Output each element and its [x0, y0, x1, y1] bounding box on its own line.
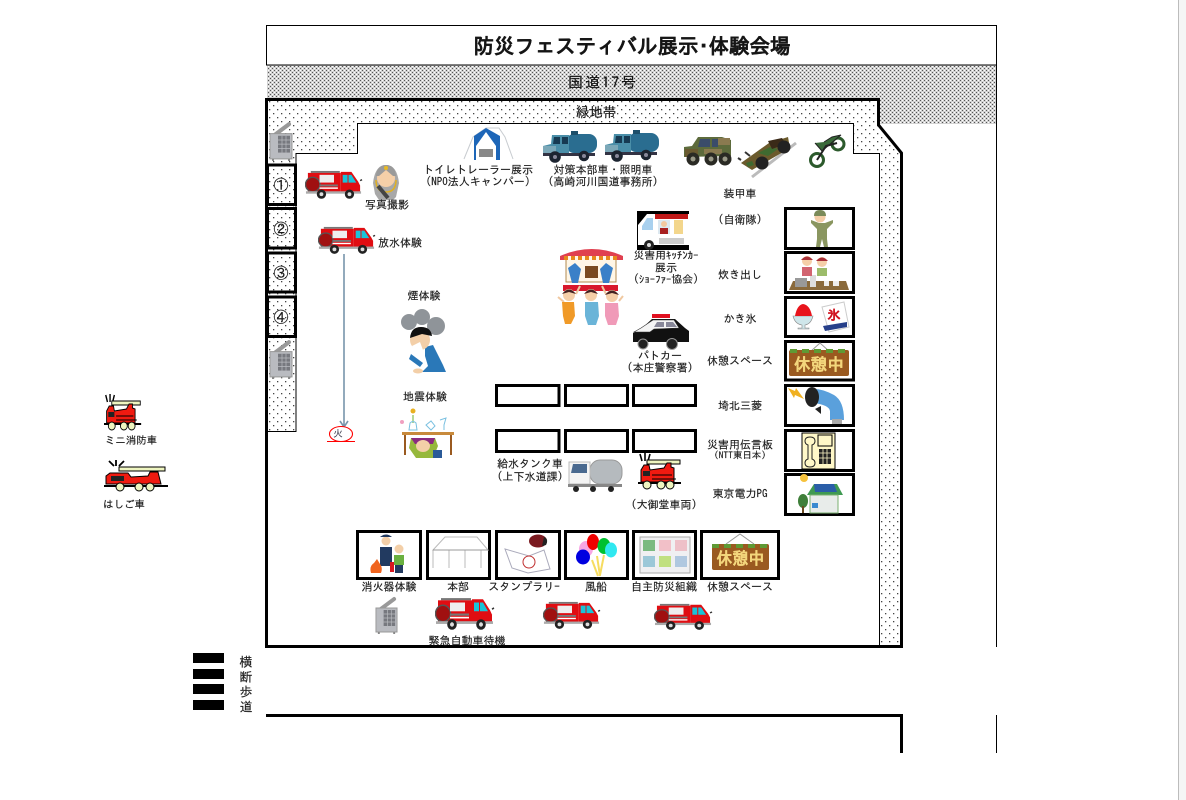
crosswalk label: 断: [240, 670, 252, 684]
entrance 1: [268, 165, 296, 204]
icon: festival stage with dancers: [558, 249, 623, 325]
crosswalk label: 道: [240, 700, 252, 714]
entrance 4: ④: [274, 310, 288, 324]
bottom booth: rest space sign: [702, 532, 778, 578]
entrance 3: [268, 253, 296, 292]
omido vehicle: [631, 453, 697, 510]
page edge: [1178, 0, 1186, 800]
arrow: water stream: [340, 254, 348, 427]
booth row bottom: [496, 430, 696, 452]
bottom booth: rest space sign: 休憩中: [716, 550, 764, 568]
icon: fire truck: [318, 227, 375, 254]
crosswalk label: [240, 656, 252, 714]
icon: military truck: [684, 137, 732, 166]
kitchen car exhibit: [634, 211, 698, 285]
booth: cooking: [786, 252, 854, 292]
icon: generator middle: [270, 342, 292, 379]
right booth list labels: (NTT東日本): [714, 450, 766, 460]
label: 災害用ｷｯﾁﾝｶｰ: [634, 250, 698, 261]
label: 給水タンク車: [497, 458, 563, 470]
label: rest space: 休憩スペース: [707, 354, 773, 366]
label: stamp rally: スタンプラリ-: [488, 580, 560, 592]
right boundary line: [996, 25, 998, 753]
icon: armored car: [738, 137, 796, 177]
icon: firefighter: [373, 165, 399, 200]
label: 放水体験: [378, 236, 422, 248]
road: route 17: 国道17号: [568, 74, 636, 90]
bottom booth: extinguisher: [358, 532, 420, 578]
booth: rest space sign: 休憩中: [794, 356, 844, 374]
bottom booth: headquarters tent: [428, 532, 490, 578]
police car: (本庄警察署): [627, 362, 693, 374]
icon: police car: [633, 314, 689, 350]
label: cooking: 炊き出し: [718, 270, 762, 280]
booth: shaved ice: 氷: [828, 308, 840, 322]
water discharge experience: [318, 227, 422, 254]
icon: generator bottom: [376, 599, 397, 634]
label: self defense force: (自衛隊): [718, 214, 762, 226]
right booth list labels: [707, 270, 773, 500]
command and lighting vehicles: (高崎河川国道事務所): [548, 176, 658, 188]
entrance 3: ③: [274, 266, 288, 280]
photo spot: [305, 165, 409, 210]
label: パトカー: [638, 350, 682, 362]
label: extinguisher: 消火器体験: [362, 580, 416, 592]
entrance 2: [268, 208, 296, 248]
bottom booth: stamp rally: [496, 532, 560, 578]
crosswalk stripes: [193, 653, 224, 710]
label: 緊急自動車待機: [428, 634, 506, 646]
kitchen car exhibit: (ｼｮｰﾌｧｰ協会): [634, 274, 698, 285]
fire target: 火: [333, 429, 343, 439]
police car: [627, 314, 693, 374]
icon: blue truck 2: [605, 130, 659, 162]
bottom booth: voluntary disaster group panel: [634, 532, 696, 578]
smoke experience: [401, 290, 446, 374]
label: armored vehicle: 装甲車: [724, 188, 756, 200]
icon: generator top: [270, 124, 292, 161]
road: route 17: [267, 66, 996, 124]
command and lighting vehicles: [543, 130, 659, 188]
label: shaved ice: かき氷: [724, 314, 756, 324]
icon: kitchen car: [637, 211, 689, 250]
icon: person in smoke: [401, 309, 446, 374]
booth: soldier: [786, 208, 854, 248]
bottom booth: balloons: [566, 532, 628, 578]
icon: tank truck: [568, 460, 622, 492]
booth: car charger: [786, 386, 854, 426]
entrance 1: ①: [274, 178, 288, 192]
crosswalk label: 歩: [240, 686, 252, 698]
label: 煙体験: [408, 290, 440, 302]
toilet trailer exhibit: (NPO法人キャンパー): [426, 176, 530, 188]
icon: fire truck 3: [654, 604, 712, 630]
crosswalk: [193, 653, 252, 714]
label: voluntary disaster group: 自主防災組織: [631, 580, 697, 592]
icon: person under table: [400, 408, 454, 458]
empty booths: [496, 386, 696, 452]
icon: tent: [464, 128, 513, 160]
venue thick boundary: [266, 100, 902, 646]
entrance boxes column: [268, 165, 296, 336]
title bar: 防災フェスティバル展示･体験会場: [474, 34, 790, 56]
booth: shaved ice: [786, 298, 854, 336]
label: 対策本部車・照明車: [554, 164, 652, 176]
booth: rest space sign: [786, 342, 854, 380]
label: 地震体験: [403, 390, 447, 402]
label: message board: 災害用伝言板: [707, 440, 773, 450]
label: saihoku mitsubishi: 埼北三菱: [718, 400, 762, 412]
label: balloons: 風船: [585, 580, 607, 592]
label: ミニ消防車: [105, 435, 157, 446]
kitchen car exhibit: 展示: [655, 262, 677, 274]
earthquake experience: [400, 390, 454, 458]
entrance 2: ②: [274, 222, 288, 236]
booth row top: [496, 386, 696, 406]
entrance 4: [268, 297, 296, 336]
label: トイレトレーラー展示: [423, 164, 533, 176]
crosswalk label: 横: [240, 656, 252, 668]
toilet trailer exhibit: [423, 128, 533, 188]
title bar: [266, 26, 996, 65]
armored vehicles: [684, 135, 844, 226]
water tank truck: [497, 458, 622, 492]
label: はしご車: [103, 499, 145, 510]
booth: solar house: [786, 474, 854, 514]
icon: motorcycle: [810, 135, 844, 166]
icon: fire truck: [436, 598, 494, 630]
water tank truck: (上下水道課): [497, 470, 563, 482]
label: headquarters: 本部: [447, 582, 469, 592]
label: (大御堂車両): [631, 498, 697, 510]
icon: blue truck 1: [543, 131, 597, 163]
icon: long ladder truck: [104, 460, 168, 491]
booth: message board phone: [786, 430, 854, 470]
label: rest space: 休憩スペース: [707, 580, 773, 592]
emergency vehicle standby: [428, 598, 506, 646]
label: tepco: 東京電力PG: [712, 488, 768, 500]
icon: ladder truck: [638, 453, 681, 489]
green belt label: 緑地帯: [576, 105, 616, 119]
legend: ladder truck: [103, 460, 168, 510]
legend: mini fire engine: [104, 394, 157, 446]
label: 写真撮影: [365, 200, 409, 210]
icon: fire truck 2: [543, 602, 600, 629]
icon: mini ladder truck: [104, 394, 141, 430]
fire target: [327, 426, 355, 442]
road edge lines: [266, 714, 902, 753]
icon: fire truck: [305, 171, 362, 199]
